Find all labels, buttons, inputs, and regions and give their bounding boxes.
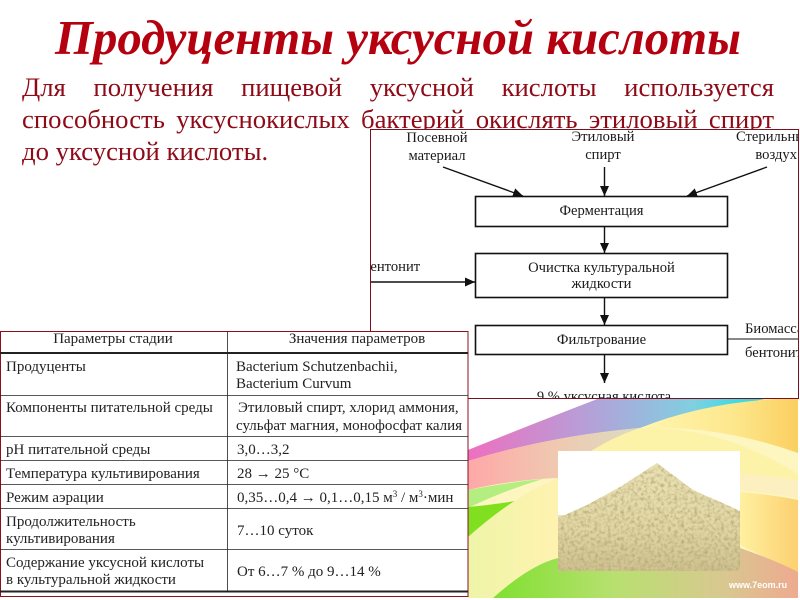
input: bentonite <box>362 259 475 282</box>
row values: 3 <box>393 489 398 499</box>
arrow: purification to filtration <box>604 298 606 325</box>
row labels: культивирования <box>6 531 115 547</box>
input labels <box>406 129 635 164</box>
input label: sterile air <box>736 129 800 163</box>
intro text: до уксусной кислоты. <box>22 136 268 166</box>
box: purification: жидкости <box>570 276 632 292</box>
input label: sterile air: воздух <box>755 147 798 163</box>
box: fermentation <box>476 196 728 226</box>
arrow: fermentation to purification <box>604 227 606 253</box>
box: purification <box>476 254 728 298</box>
box: filtration: Фильтрование <box>557 332 646 348</box>
table grid <box>0 331 468 592</box>
box: purification: Очистка культуральной <box>528 260 675 276</box>
row values: 7…10 суток <box>237 523 314 539</box>
table: stage parameters <box>0 331 468 597</box>
arrow: ethanol <box>604 167 606 196</box>
table header <box>53 331 425 347</box>
photo: pile of powder <box>558 451 740 571</box>
input labels: Посевной <box>406 130 468 146</box>
row values: ·мин <box>423 490 453 506</box>
row labels: pH питательной среды <box>6 442 150 458</box>
row labels: Режим аэрации <box>6 490 104 506</box>
arrow: sterile air <box>687 167 767 196</box>
row labels: в культуральной жидкости <box>6 572 176 588</box>
row values: Bacterium Schutzenbachii, <box>236 359 398 375</box>
title: Продуценты уксусной кислоты <box>55 10 741 64</box>
row values: Этиловый спирт, хлорид аммония, <box>238 400 459 416</box>
row values: сульфат магния, монофосфат калия <box>236 418 462 434</box>
row labels: Компоненты питательной среды <box>6 400 213 416</box>
row values: 3,0…3,2 <box>237 442 290 458</box>
intro text <box>22 72 774 166</box>
row labels: Содержание уксусной кислоты <box>6 555 204 571</box>
row values: Bacterium Curvum <box>236 376 352 392</box>
row labels <box>6 359 213 588</box>
arrow: seed material <box>443 167 523 196</box>
row values <box>236 359 462 580</box>
row values: 0,35…0,4 → 0,1…0,15 м <box>237 490 393 506</box>
input labels: материал <box>408 148 466 164</box>
row values: 28 → 25 °С <box>237 466 309 482</box>
row labels: Продуценты <box>6 359 86 375</box>
watermark: www.7eom.ru <box>729 580 787 590</box>
panel: process flow diagram <box>370 129 799 399</box>
row values: 3 <box>418 489 423 499</box>
output: biomass and bentonite <box>728 321 800 361</box>
input labels: спирт <box>585 147 621 163</box>
row values: / м <box>397 490 419 506</box>
box: fermentation: Ферментация <box>560 203 644 219</box>
arrow: filtration to product <box>604 355 606 383</box>
table header: Параметры стадии <box>53 331 173 347</box>
table header: Значения параметров <box>289 331 425 347</box>
intro text: способность уксуснокислых бактерий окислять этиловый спирт <box>22 104 774 134</box>
intro text: Для получения пищевой уксусной кислоты используется <box>22 72 774 102</box>
box: filtration <box>476 326 728 354</box>
row labels: Продолжительность <box>6 514 136 530</box>
row values: От 6…7 % до 9…14 % <box>237 564 381 580</box>
row labels: Температура культивирования <box>6 466 200 482</box>
